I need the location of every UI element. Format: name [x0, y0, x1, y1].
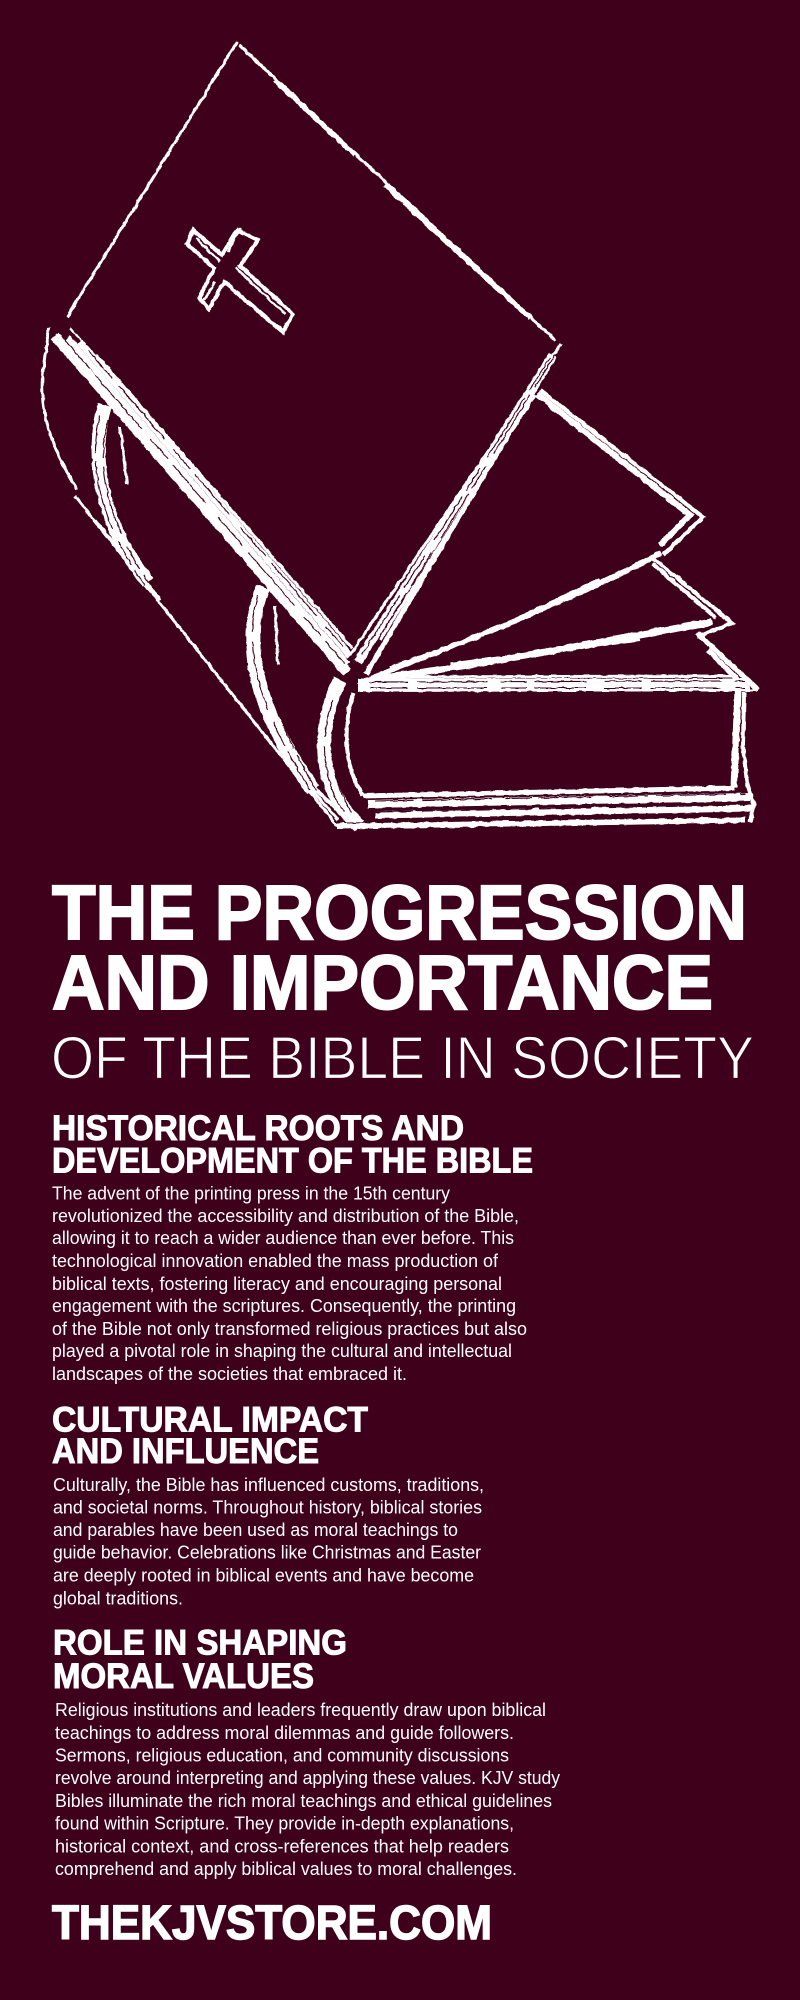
- book spine: [42, 327, 355, 826]
- section 1 body text: biblical texts, fostering literacy and encouraging personal: [52, 1273, 502, 1294]
- footer website: THEKJVSTORE.COM: [52, 1897, 492, 1950]
- section 2 heading: AND INFLUENCE: [52, 1432, 319, 1471]
- section 2 body text: and societal norms. Throughout history, biblical stories: [53, 1496, 482, 1518]
- section 3 body text: historical context, and cross-references that help readers: [55, 1836, 509, 1856]
- section 1 body text: revolutionized the accessibility and distribution of the Bible,: [52, 1205, 519, 1226]
- cross on cover: [187, 228, 293, 332]
- section 3 body text: comprehend and apply biblical values to moral challenges.: [55, 1858, 517, 1879]
- section 2 body text: [53, 1474, 484, 1608]
- section 3 body text: teachings to address moral dilemmas and guide followers.: [55, 1722, 514, 1743]
- sketch scratches: [65, 340, 745, 823]
- section 1 body text: landscapes of the societies that embraced it.: [52, 1363, 407, 1384]
- section 1 heading: [52, 1109, 533, 1180]
- illustration: sketched Bible with cross: [42, 42, 758, 826]
- main title: OF THE BIBLE IN SOCIETY: [51, 1024, 754, 1092]
- section 1 body text: played a pivotal role in shaping the cultural and intellectual: [52, 1340, 512, 1361]
- fanned pages: [366, 390, 758, 690]
- section 2: cultural impact: [52, 1400, 484, 1608]
- section 3 body text: Religious institutions and leaders frequently draw upon biblical: [55, 1699, 546, 1720]
- section 3 body text: Bibles illuminate the rich moral teachings and ethical guidelines: [55, 1790, 552, 1811]
- section 1 body text: [52, 1182, 527, 1384]
- section 3 heading: MORAL VALUES: [53, 1657, 314, 1696]
- front cover outline: [67, 42, 561, 674]
- section 2 body text: Culturally, the Bible has influenced customs, traditions,: [53, 1474, 484, 1495]
- section 2 body text: are deeply rooted in biblical events and have become: [53, 1564, 474, 1586]
- section 1 heading: DEVELOPMENT OF THE BIBLE: [52, 1142, 533, 1180]
- section 2 heading: CULTURAL IMPACT: [52, 1400, 368, 1440]
- section 1: historical roots: [52, 1109, 533, 1384]
- section 1 body text: technological innovation enabled the mass production of: [52, 1250, 499, 1271]
- section 2 body text: global traditions.: [53, 1588, 183, 1608]
- main title: [51, 870, 754, 1092]
- section 2 heading: [52, 1400, 368, 1471]
- section 1 body text: allowing it to reach a wider audience than ever before. This: [52, 1227, 514, 1248]
- section 3 heading: [53, 1624, 347, 1696]
- section 3: moral values: [53, 1624, 561, 1879]
- main title: THE PROGRESSION: [52, 870, 747, 956]
- section 1 body text: The advent of the printing press in the 15th century: [52, 1182, 451, 1204]
- section 3 body text: Sermons, religious education, and community discussions: [55, 1744, 509, 1766]
- section 3 body text: [55, 1699, 561, 1879]
- section 3 heading: ROLE IN SHAPING: [53, 1624, 347, 1662]
- section 3 body text: found within Scripture. They provide in-depth explanations,: [55, 1812, 514, 1834]
- page block: [324, 676, 758, 826]
- section 2 body text: and parables have been used as moral teachings to: [53, 1519, 458, 1540]
- section 3 body text: revolve around interpreting and applying these values. KJV study: [55, 1767, 561, 1788]
- section 1 body text: engagement with the scriptures. Consequently, the printing: [52, 1295, 516, 1316]
- section 2 body text: guide behavior. Celebrations like Christmas and Easter: [53, 1542, 481, 1562]
- section 1 body text: of the Bible not only transformed religious practices but also: [52, 1318, 527, 1339]
- main title: AND IMPORTANCE: [52, 940, 713, 1026]
- section 1 heading: HISTORICAL ROOTS AND: [52, 1109, 464, 1148]
